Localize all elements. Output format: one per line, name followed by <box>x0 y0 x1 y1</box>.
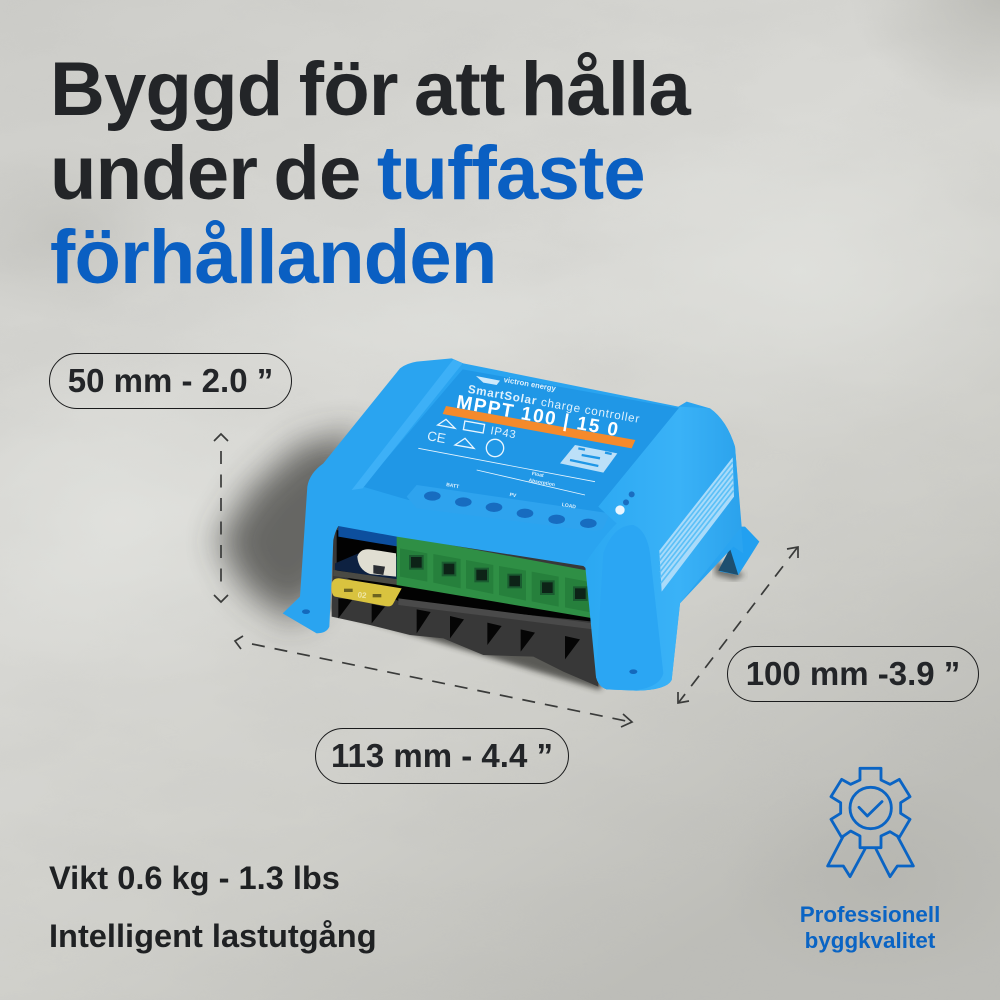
device labels: victron energy <box>503 375 557 393</box>
device labels: CE <box>426 428 447 446</box>
device labels: MPPT 100 | 15 0 <box>455 392 621 441</box>
dimension: length <box>315 728 569 784</box>
title: Byggd för att hålla <box>50 47 690 132</box>
weight text: Vikt 0.6 kg - 1.3 lbs <box>49 859 340 896</box>
device labels: Absorption <box>528 478 555 488</box>
dimension: height: 50 mm - 2.0 ” <box>68 362 273 399</box>
status led <box>615 491 635 515</box>
dimension: width: 100 mm -3.9 ” <box>746 655 960 692</box>
device labels: PV <box>509 492 517 499</box>
foot holes <box>302 609 637 674</box>
top panel <box>363 369 679 513</box>
title: förhållanden <box>50 215 496 300</box>
load output text: Intelligent lastutgång <box>49 917 377 954</box>
badge caption: byggkvalitet <box>805 928 935 953</box>
title <box>50 47 692 300</box>
orange stripe <box>443 406 635 448</box>
ventilation label <box>659 457 734 592</box>
green terminal block <box>397 535 593 618</box>
cavity blue strip <box>338 525 398 547</box>
right rear foot <box>720 527 759 575</box>
device labels <box>426 375 641 510</box>
dimension: width <box>727 646 979 702</box>
circuit board and connector <box>333 549 398 585</box>
device labels: LOAD <box>561 502 577 510</box>
heat sink <box>332 520 598 687</box>
icon: quality badge <box>826 766 915 878</box>
front lip <box>407 485 610 531</box>
dimension: length: 113 mm - 4.4 ” <box>331 737 553 774</box>
product: charge controller <box>282 358 760 691</box>
arrow: length <box>234 635 634 728</box>
device labels: IP43 <box>489 425 517 441</box>
device labels: BATT <box>446 482 459 490</box>
product shadow <box>198 414 746 694</box>
dimension: height <box>49 353 292 409</box>
fuse: 02 <box>357 590 367 600</box>
badge caption: Professionell <box>800 902 940 927</box>
front screw holes <box>424 491 597 528</box>
device labels: Float <box>531 471 544 479</box>
device icons <box>418 419 595 495</box>
right end cap <box>585 407 742 691</box>
qr code <box>560 445 617 473</box>
title: under de tuffaste <box>50 131 645 216</box>
fuse <box>331 578 402 606</box>
badge caption <box>800 902 940 953</box>
arrow: height <box>214 432 228 604</box>
device labels: SmartSolar charge controller <box>467 383 641 426</box>
blue housing <box>283 358 743 691</box>
arrow: width <box>677 546 799 704</box>
